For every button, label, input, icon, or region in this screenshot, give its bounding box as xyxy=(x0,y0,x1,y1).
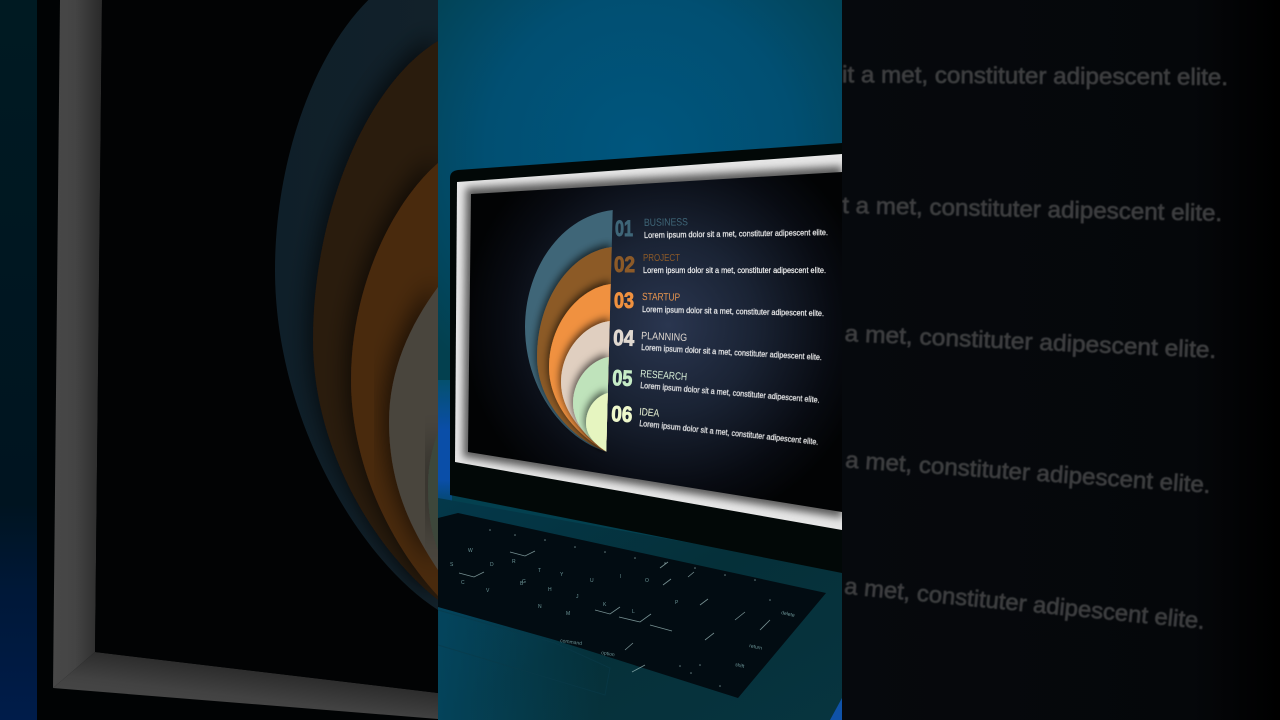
keyboard: K xyxy=(603,602,607,608)
row 04: Lorem ipsum dolor sit a met, constituter adipescent elite. xyxy=(641,342,822,362)
arc 03 startup xyxy=(549,284,611,452)
keyboard: C xyxy=(461,580,465,586)
arc 06 idea xyxy=(586,393,608,452)
keyboard: W xyxy=(468,548,473,554)
row 06 xyxy=(612,406,818,446)
row 02 xyxy=(614,254,826,275)
arc 05 research xyxy=(573,357,609,452)
row 04: 04 xyxy=(613,325,635,351)
keyboard: H xyxy=(548,587,552,593)
keyboard: I xyxy=(620,574,621,580)
row 03: Lorem ipsum dolor sit a met, constituter adipescent elite. xyxy=(642,304,824,318)
row 05: Lorem ipsum dolor sit a met, constituter adipescent elite. xyxy=(640,380,820,405)
row 04: PLANNING xyxy=(641,330,687,344)
keyboard: delete xyxy=(781,610,795,619)
ghost text line 2: t a met, constituter adipescent elite. xyxy=(842,192,1222,226)
half circle nested chart xyxy=(525,210,613,452)
row 03 xyxy=(614,292,824,318)
row 01: Lorem ipsum dolor sit a met, constituter adipescent elite. xyxy=(644,227,828,240)
keyboard: M xyxy=(566,611,570,617)
left light frame xyxy=(53,0,438,719)
row 01: BUSINESS xyxy=(644,216,688,229)
row 01 xyxy=(615,218,828,240)
row 02: PROJECT xyxy=(643,252,680,264)
row 06: 06 xyxy=(611,401,633,427)
row 03: 03 xyxy=(614,288,634,313)
light screen frame xyxy=(455,154,842,530)
row 02: 02 xyxy=(614,252,635,277)
row 05: RESEARCH xyxy=(640,368,688,383)
keyboard: command xyxy=(560,638,583,647)
keyboard: L xyxy=(632,609,635,615)
ghost text line 5: a met, constituter adipescent elite. xyxy=(843,573,1206,634)
row 05: 05 xyxy=(612,365,633,391)
keyboard xyxy=(438,513,826,698)
row 01: 01 xyxy=(615,216,633,241)
left dark screen xyxy=(95,0,438,693)
arc 02 project xyxy=(537,247,612,452)
ghost text line 4: a met, constituter adipescent elite. xyxy=(845,447,1211,498)
ghost text line 3: a met, constituter adipescent elite. xyxy=(844,320,1217,363)
ghost text line 1: it a met, constituter adipescent elite. xyxy=(842,61,1228,90)
keyboard: J xyxy=(576,594,579,600)
keyboard: V xyxy=(486,588,490,594)
keyboard: return xyxy=(749,643,763,652)
panel: centre laptop photo xyxy=(438,0,842,720)
row 06: IDEA xyxy=(639,406,660,420)
keyboard: N xyxy=(538,604,542,610)
keyboard: option xyxy=(601,650,615,658)
screen slide background xyxy=(468,172,842,512)
row 03: STARTUP xyxy=(642,291,680,304)
keyboard: P xyxy=(675,600,679,606)
arc 04 planning xyxy=(561,321,610,452)
panel: right zoomed background with blurred text xyxy=(842,0,1280,720)
panel: left zoomed background xyxy=(0,0,438,720)
keyboard: shift xyxy=(735,662,745,670)
row 05 xyxy=(612,370,819,404)
keyboard: B xyxy=(520,581,524,587)
keyboard: R xyxy=(512,559,516,565)
keyboard: S xyxy=(450,562,454,568)
keyboard: Y xyxy=(560,572,564,578)
keyboard: G xyxy=(522,579,526,585)
keyboard: O xyxy=(645,578,649,584)
row 04 xyxy=(614,329,822,360)
row 06: Lorem ipsum dolor sit a met, constituter adipescent elite. xyxy=(639,418,819,447)
keyboard: U xyxy=(590,578,594,584)
arc 01 business xyxy=(525,210,613,452)
left enlarged arcs xyxy=(275,0,438,610)
keyboard: T xyxy=(538,568,541,574)
keyboard: D xyxy=(490,562,494,568)
laptop bezel xyxy=(450,143,842,573)
row 02: Lorem ipsum dolor sit a met, constituter adipescent elite. xyxy=(643,265,826,275)
laptop deck xyxy=(438,498,842,720)
